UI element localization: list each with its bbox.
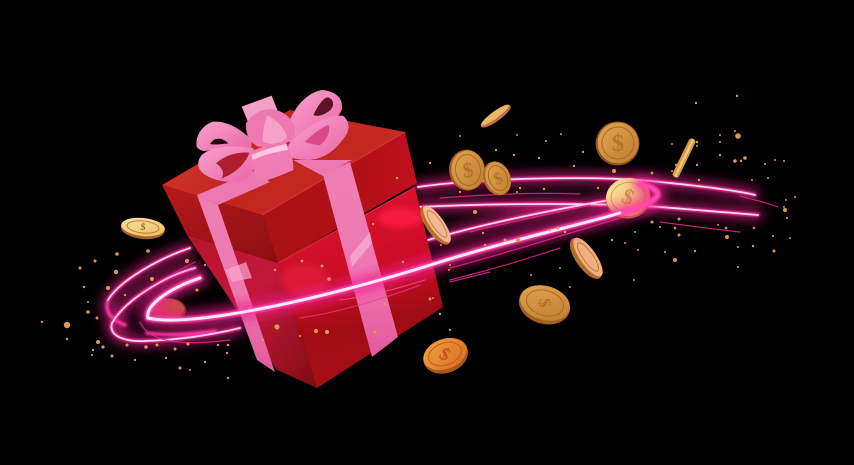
central petals [246,109,295,147]
main neon streak in front of box [148,184,658,320]
central knot [250,141,293,182]
coin 6 edge right [672,138,696,178]
ribbon on lid top [197,171,270,205]
coin 5 upper [596,122,640,166]
lid edge highlight [262,132,415,263]
coin 5 upper: $ [612,131,624,157]
coin 3: $ [461,157,475,183]
coin 11 orange bottom: $ [436,343,454,365]
coin 1 left flat: $ [140,222,146,233]
coin 7 bright centre: $ [618,183,638,210]
neon streaks behind box [107,178,778,343]
body highlight [378,208,422,228]
ribbon gloss [350,232,372,267]
coin 1 left flat [120,216,166,241]
coin 4 [478,157,516,200]
bow tail [242,96,281,127]
box body left face [187,235,317,388]
right ribbon [323,162,398,357]
coins [120,102,696,380]
coin 10 lower: $ [535,298,555,308]
right lower loop [288,116,349,160]
coin behind streak: inner left [150,298,186,322]
coin 3 [446,147,488,193]
box body right face [278,187,443,388]
coin 7 bright centre [603,175,653,221]
coin 4: $ [491,168,506,189]
faint streak lines [130,193,778,343]
coin 10 lower [514,279,575,330]
lid right face [262,132,417,263]
left upper loop [196,122,252,151]
lid top face [162,110,405,215]
coin 9 tilted [564,233,608,284]
coin 11 orange bottom [418,332,473,380]
left ribbon [197,195,275,372]
bow [196,90,349,182]
mid glow [107,178,758,341]
right upper loop [287,90,342,143]
coin 2 edge top [478,102,513,131]
lid left face [162,185,278,263]
glow halo [107,178,758,341]
left lower loop [198,146,255,182]
hot cores [108,178,758,341]
gift box [162,90,443,388]
golden particles [41,95,796,379]
coin 8 tilted by box [415,201,456,249]
